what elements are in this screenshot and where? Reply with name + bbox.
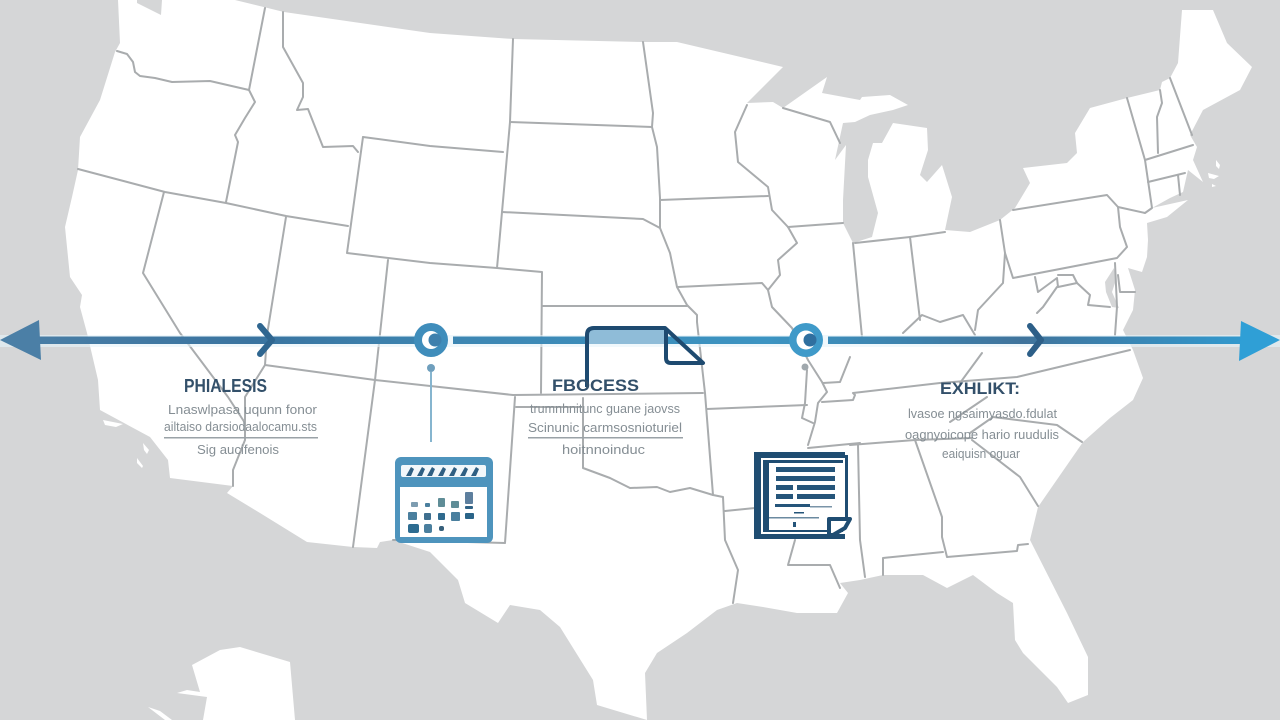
timeline shaft right	[828, 336, 1245, 344]
calendar body	[400, 487, 487, 537]
document folded corner	[829, 519, 850, 535]
calendar header strip	[401, 465, 486, 477]
calendar date cells	[408, 492, 474, 533]
description: hoitnnoinduc	[562, 442, 646, 457]
text block: exhibit	[905, 379, 1059, 461]
document text lines	[769, 467, 835, 527]
icon: document	[754, 452, 850, 539]
description	[164, 402, 318, 457]
timeline shaft left	[35, 336, 415, 344]
left arrowhead	[0, 320, 41, 360]
connector from node 1 to calendar	[427, 364, 435, 442]
calendar rings	[406, 467, 479, 476]
timeline	[0, 320, 1280, 361]
icon: folded document on timeline	[587, 328, 703, 387]
icon: calendar	[395, 457, 493, 543]
description	[905, 406, 1059, 461]
timeline node 1	[414, 323, 448, 357]
description: trumnhnitunc guane jaovss	[530, 401, 680, 416]
description: lvasoe ngsaimyasdo.fdulat	[908, 406, 1057, 421]
text block: phases	[164, 376, 318, 457]
timeline node 2	[789, 323, 823, 357]
chevron marker left	[260, 326, 272, 354]
description: eaiquisn oguar	[942, 446, 1021, 461]
chevron marker right	[1030, 326, 1041, 354]
text block: process	[528, 376, 683, 457]
heading: EXHLIKT:	[940, 379, 1020, 398]
connector pin for node 2	[802, 364, 808, 370]
description: Lnaswlpasa uqunn fonor	[168, 402, 318, 417]
heading: PHIALESIS	[184, 376, 267, 396]
Chesapeake bay	[1105, 268, 1119, 308]
Alaska	[148, 647, 295, 720]
state borders	[78, 8, 1193, 603]
description: oagnyoicope hario ruudulis	[905, 427, 1059, 442]
description: Scinunic carmsosnioturiel	[528, 420, 682, 435]
right arrowhead	[1239, 321, 1280, 361]
description: ailtaiso darsiodaalocamu.sts	[164, 419, 317, 434]
description	[528, 401, 682, 457]
description: Sig aucifenois	[197, 442, 279, 457]
heading: FBOCESS	[552, 376, 639, 395]
timeline glow	[0, 335, 1280, 347]
timeline shaft middle	[453, 336, 798, 344]
Hawaii and Alaska islands	[103, 160, 1220, 468]
